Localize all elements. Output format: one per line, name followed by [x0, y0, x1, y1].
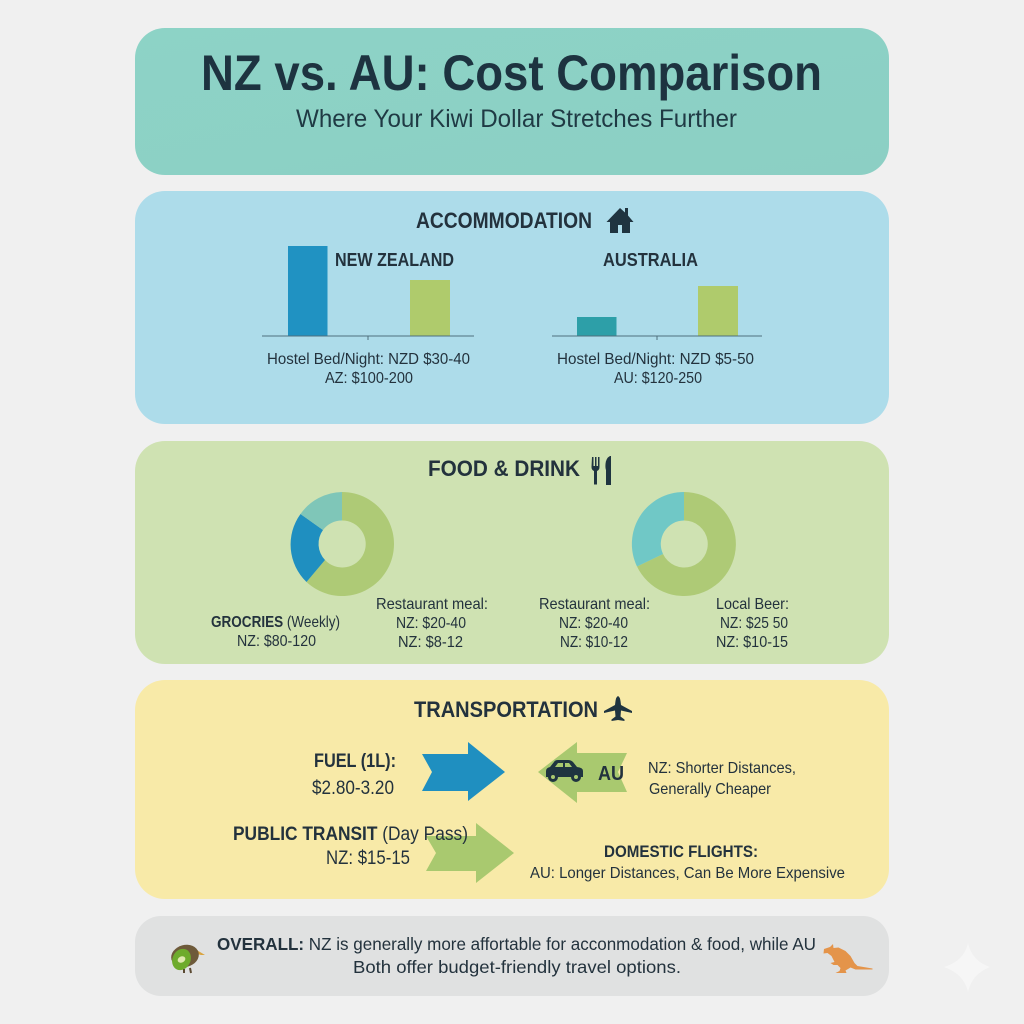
bar chart: Australia	[552, 250, 762, 387]
text: summary	[217, 934, 816, 977]
text: shorter distances: NZ: Shorter Distances,	[648, 760, 796, 777]
text: groceries: NZ: $80-120	[237, 633, 316, 650]
text: restaurant meal NZ: NZ: $20-40	[396, 615, 466, 632]
donut chart: Australia	[632, 492, 736, 596]
text: groceries	[211, 614, 340, 650]
icon: kiwi	[169, 942, 205, 973]
bar chart: New Zealand	[262, 246, 474, 387]
text: restaurant meal AU: Restaurant meal:	[539, 596, 650, 613]
text: fuel	[312, 751, 396, 799]
subtitle: Where Your Kiwi Dollar Stretches Further	[296, 105, 737, 133]
text: shorter distances: Generally Cheaper	[649, 781, 772, 798]
icon: fork and knife	[592, 456, 611, 485]
panel: overall summary	[135, 916, 889, 996]
panel: food and drink	[135, 441, 889, 664]
heading: transportation: TRANSPORTATION	[414, 697, 598, 722]
text: local beer: NZ: $10-15	[716, 634, 788, 651]
arrow: fuel blue	[422, 742, 505, 801]
bar chart: New Zealand: Hostel Bed/Night: NZD $30-40	[267, 351, 470, 368]
title: NZ vs. AU: Cost Comparison	[201, 45, 822, 101]
text: local beer: NZ: $25 50	[720, 615, 788, 632]
icon: sparkle watermark	[944, 943, 990, 992]
arrow: AU green	[538, 742, 627, 803]
text: restaurant meal AU: NZ: $20-40	[559, 615, 628, 632]
text: fuel: FUEL (1L):	[314, 751, 396, 772]
heading: food and drink: FOOD & DRINK	[428, 456, 580, 481]
bar chart: New Zealand: NEW ZEALAND	[335, 250, 454, 270]
text: fuel: $2.80-3.20	[312, 778, 394, 799]
panel: transportation	[135, 680, 889, 899]
text: public transit: NZ: $15-15	[326, 848, 410, 869]
text: restaurant meal AU: NZ: $10-12	[560, 634, 628, 651]
text: public transit: PUBLIC TRANSIT (Day Pass)	[233, 824, 468, 845]
icon: airplane	[604, 696, 632, 721]
donut chart: New Zealand	[291, 492, 394, 596]
text: domestic flights: DOMESTIC FLIGHTS:	[604, 842, 758, 861]
bar chart: Australia: AUSTRALIA	[603, 250, 698, 270]
text: summary: Both offer budget-friendly travel options.	[353, 957, 681, 977]
icon: house	[606, 208, 634, 233]
bar chart: New Zealand: AZ: $100-200	[325, 370, 413, 387]
bar chart: Australia: AU: $120-250	[614, 370, 702, 387]
text: public transit	[233, 824, 468, 869]
panel: accommodation	[135, 191, 889, 424]
bar chart: Australia: Hostel Bed/Night: NZD $5-50	[557, 351, 754, 368]
panel: title header	[135, 28, 889, 175]
text: shorter distances	[648, 760, 796, 798]
text: restaurant meal NZ: NZ: $8-12	[398, 634, 463, 651]
arrow: public transit green	[426, 823, 514, 883]
icon: car	[546, 760, 583, 782]
text: local beer	[716, 596, 789, 651]
text: restaurant meal NZ	[376, 596, 488, 651]
text: domestic flights	[530, 842, 845, 882]
text: domestic flights: AU: Longer Distances, Can Be More Expensive	[530, 865, 845, 882]
label: AU: AU	[598, 763, 624, 785]
text: summary: OVERALL: NZ is generally more affortable for acconmodation & food, while AU	[217, 934, 816, 954]
text: local beer: Local Beer:	[716, 596, 789, 613]
heading: accommodation: ACCOMMODATION	[416, 208, 592, 233]
text: restaurant meal NZ: Restaurant meal:	[376, 596, 488, 613]
text: restaurant meal AU	[539, 596, 650, 651]
icon: kangaroo	[824, 944, 872, 973]
text: groceries: GROCRIES (Weekly)	[211, 614, 340, 631]
